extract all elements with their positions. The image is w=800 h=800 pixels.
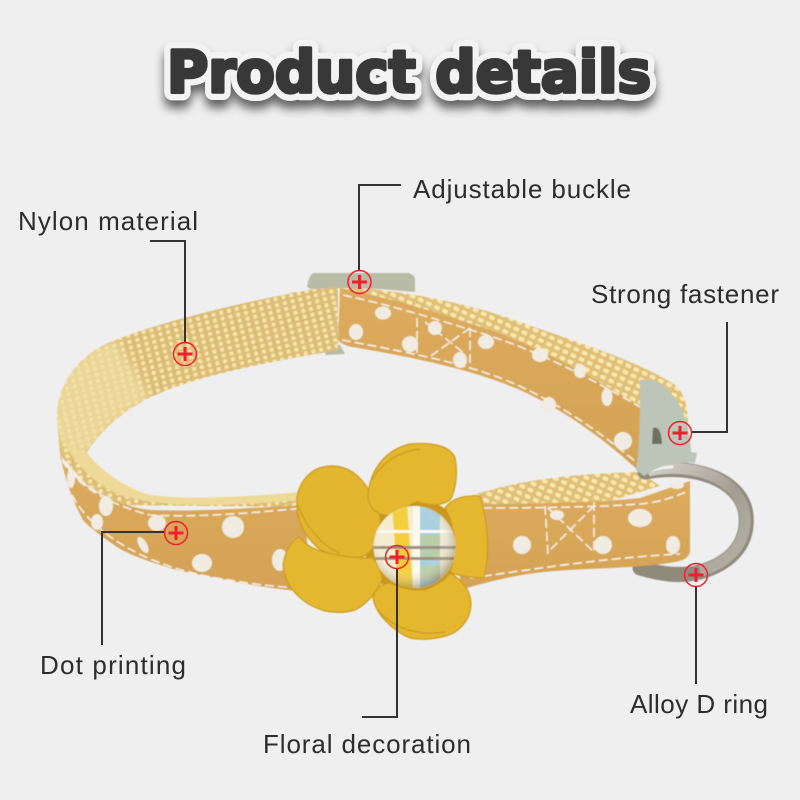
marker: D ring <box>684 564 708 586</box>
side release fastener <box>636 380 697 476</box>
petal: top <box>368 443 456 515</box>
nylon back band <box>57 285 338 507</box>
callout: Dot printing: Dot printing <box>40 650 186 680</box>
callout: Adjustable buckle <box>359 174 631 270</box>
callout: Dot printing <box>40 532 186 680</box>
marker: dots <box>164 522 188 544</box>
marker: nylon <box>174 342 196 366</box>
plaid ball <box>372 505 456 589</box>
callout: Strong fastener: Strong fastener <box>591 279 779 309</box>
callout: Alloy D ring: Alloy D ring <box>630 689 768 719</box>
stitching <box>62 295 642 588</box>
petal: upper left <box>297 466 380 558</box>
callout: Nylon material <box>18 206 198 342</box>
petal: right <box>445 496 487 578</box>
lower strap stitching <box>470 491 688 578</box>
fastener slot <box>652 428 662 444</box>
title: Product details <box>167 38 651 106</box>
collar illustration <box>52 273 746 639</box>
callout: Floral decoration <box>263 569 471 759</box>
nylon lower rim <box>58 425 300 505</box>
printed strap lower right <box>460 481 690 590</box>
nylon lower right strap <box>465 472 660 508</box>
nylon inner curve <box>52 340 150 458</box>
callout: Nylon material: Nylon material <box>18 206 198 236</box>
flower <box>283 443 487 639</box>
petal: lower left <box>283 537 382 612</box>
callout: Floral decoration: Floral decoration <box>263 729 471 759</box>
lower strap dots <box>513 481 684 554</box>
title: Product details <box>167 38 651 106</box>
petal: lower right <box>373 573 471 639</box>
flower backing <box>365 498 463 596</box>
marker: fastener <box>668 422 692 444</box>
nylon right strap top <box>340 287 688 425</box>
callout: Strong fastener <box>591 279 779 432</box>
callout: Adjustable buckle: Adjustable buckle <box>413 174 631 204</box>
D ring <box>640 467 746 575</box>
adjustable buckle <box>307 273 415 355</box>
printed strap left <box>60 455 310 592</box>
petal fold lines <box>298 449 445 633</box>
printed strap upper right <box>338 288 645 472</box>
polka dots <box>67 306 632 572</box>
callout: Alloy D ring <box>630 587 768 719</box>
nylon fold at buckle <box>290 287 338 358</box>
marker: buckle <box>348 270 371 294</box>
marker: flower <box>386 546 408 568</box>
